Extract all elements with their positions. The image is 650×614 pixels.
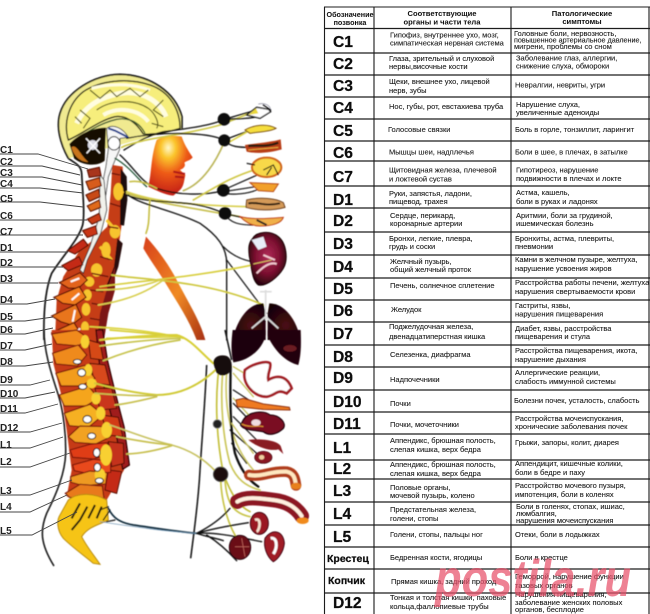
table header: Обозначение	[326, 10, 374, 19]
vertebrae lower left	[52, 330, 111, 499]
label text: C6	[0, 211, 13, 222]
vertebra codes column: D9	[333, 370, 353, 387]
organs column: голени, стопы	[390, 514, 438, 523]
symptoms column: Расстройства пищеварения, икота,	[515, 346, 637, 355]
table header: Соответствующие	[407, 9, 477, 18]
lower body illustration	[42, 330, 309, 566]
organs column: Селезенка, диафрагма	[390, 350, 471, 359]
table header	[326, 9, 612, 27]
label text: D10	[0, 389, 19, 400]
symptoms column: снижение слуха, обмороки	[516, 62, 609, 70]
vertebra codes column: C7	[333, 169, 353, 186]
symptoms column: Грыжи, запоры, колит, диарея	[515, 438, 619, 447]
sacrum and coccyx	[58, 494, 108, 564]
symptoms column: Аритмии, боли за грудиной,	[516, 211, 613, 220]
symptoms column: заболевание женских половых	[515, 598, 623, 607]
vertebra codes column: C1	[333, 34, 353, 51]
organs column: Бедренная кости, ягодицы	[390, 553, 482, 562]
organ: eye	[247, 104, 271, 118]
organs column: нерв, зубы	[389, 86, 427, 95]
symptoms column: Болезни почек, усталость, слабость	[514, 396, 640, 405]
organs column: слепая кишка, верх бедра	[390, 469, 482, 478]
vertebra codes column: Крестец	[327, 553, 369, 565]
cerebellum	[69, 128, 106, 165]
table header: органы и части тела	[404, 18, 481, 26]
organs column: мочевой пузырь, колено	[390, 491, 475, 500]
symptoms column: Аппендицит, кишечные колики,	[515, 459, 623, 468]
organs column: Сердце, перикард,	[390, 211, 455, 220]
organs column: Аппендикс, брюшная полость,	[390, 436, 496, 445]
symptoms column: Невралгии, невриты, угри	[515, 80, 605, 90]
symptoms column: тазовых органов	[515, 581, 573, 590]
organ: heart	[249, 232, 286, 285]
organ: adrenal and kidney	[248, 439, 283, 463]
symptoms column: нарушения пищеварения	[515, 310, 603, 318]
vertebra codes column: D8	[333, 349, 353, 366]
symptoms column: Камни в желчном пузыре, желтуха,	[515, 255, 637, 264]
label text: C2	[0, 157, 13, 168]
vertebra codes column: D5	[333, 281, 353, 298]
symptoms column: боли в руках и ладонях	[516, 197, 598, 206]
label text: D12	[0, 423, 19, 434]
vertebra codes column: L5	[333, 529, 352, 546]
symptoms column: боли в бедре и паху	[515, 468, 585, 477]
vertebra codes column: D11	[333, 416, 361, 433]
symptoms column: Бронхиты, астма, плевриты,	[515, 234, 614, 243]
symptoms column: пищеварения и стула	[515, 332, 591, 341]
brainstem	[98, 126, 128, 227]
organs column: двенадцатиперстная кишка	[389, 332, 486, 341]
organ: small intestine	[249, 472, 301, 489]
organs column: Голосовые связки	[388, 125, 450, 134]
symptoms column: Заболевание глаз, аллергии,	[516, 54, 617, 62]
organs column: Руки, запястья, ладони,	[389, 189, 472, 198]
organs column: Тонкая и толстая кишки, паховые	[390, 593, 506, 602]
label text: C7	[0, 227, 13, 238]
organs column: Половые органы,	[390, 483, 450, 492]
label text: L1	[0, 440, 12, 451]
label text: L2	[0, 457, 12, 468]
vertebra codes column: D6	[333, 303, 353, 320]
symptoms column: Расстройства мочеиспускания,	[515, 414, 623, 423]
symptoms column: Гипотиреоз, нарушение	[516, 166, 598, 174]
label text: C3	[0, 168, 13, 179]
symptoms column: импотенция, боли в коленях	[515, 490, 614, 499]
body outline: skull and back	[44, 74, 182, 340]
body outline: lower back and front	[42, 330, 232, 566]
organ: reproductive and bladder	[229, 512, 284, 562]
red canal strip	[96, 330, 129, 469]
label text: L4	[0, 502, 12, 513]
label text: D1	[0, 243, 13, 254]
organs column: Щеки, внешнее ухо, лицевой	[389, 77, 490, 86]
symptoms column: нарушение дыхания	[515, 355, 586, 364]
label text: L5	[0, 526, 12, 537]
symptoms column: нарушения мочеиспускания	[516, 516, 613, 525]
head and chest nerves	[90, 105, 271, 340]
organs column: Гипофиз, внутреннее ухо, мозг,	[390, 30, 499, 40]
symptoms column: мигрени, проблемы со сном	[514, 42, 612, 51]
anatomical illustration: spine, nerves and organs	[42, 74, 309, 566]
label text: C5	[0, 194, 13, 205]
label text: D5	[0, 312, 13, 323]
vertebra codes column: L1	[333, 440, 352, 457]
table header: Патологические	[552, 9, 612, 18]
organs column: Желчный пузырь,	[390, 257, 451, 266]
vertebra codes column: C3	[333, 78, 353, 95]
lower nerves	[95, 330, 267, 561]
organs column: Голени, стопы, пальцы ног	[390, 530, 483, 539]
vertebra codes column: D10	[333, 394, 362, 411]
vertebra codes column: D1	[333, 192, 353, 209]
table grid	[324, 7, 650, 614]
label text: D7	[0, 341, 13, 352]
vertebra codes column: L2	[333, 461, 352, 478]
vertebra codes column: C5	[333, 123, 353, 140]
label text: D8	[0, 357, 13, 368]
brain	[66, 81, 180, 143]
vertebra codes column: L4	[333, 506, 352, 523]
organs column: Прямая кишка, задний проход	[391, 577, 497, 586]
organs column: коронарные артерии	[390, 219, 462, 228]
face	[148, 136, 193, 196]
symptoms column	[514, 29, 650, 614]
organs column: Глаза, зрительный и слуховой	[389, 54, 494, 63]
organs column: пищевод, трахея	[389, 197, 448, 206]
organs column: Нос, губы, рот, евстахиева труба	[389, 102, 504, 111]
table header: позвонка	[334, 18, 367, 27]
organs column: Надпочечники	[390, 375, 440, 384]
organs column: Аппендикс, брюшная полость,	[390, 460, 496, 469]
vertebral bodies lower	[88, 340, 124, 493]
organs column: кольца,фаллопиевые трубы	[390, 602, 489, 611]
esophagus	[143, 237, 205, 340]
symptoms column: люмбалгия,	[516, 509, 557, 518]
organs column: Почки	[390, 399, 411, 408]
vertebra codes column: D2	[333, 213, 353, 230]
organ: spleen and kidney	[241, 412, 284, 434]
organs column	[388, 30, 506, 611]
symptoms column: Отеки, боли в лодыжках	[515, 530, 600, 539]
organ: vocal cords	[250, 183, 278, 192]
organs column: и локтевой сустав	[389, 174, 452, 184]
symptoms column: пневмонии	[515, 242, 553, 251]
symptoms column: увеличенные аденоиды	[516, 108, 599, 117]
symptoms column: Расстройство мочевого пузыря,	[515, 481, 626, 490]
vertebra codes column: D7	[333, 326, 353, 343]
symptoms column: ишемическая болезнь	[516, 219, 594, 228]
vertebra codes column: C2	[333, 56, 353, 73]
organ: ear	[245, 125, 276, 133]
symptoms column: Гастриты, язвы,	[515, 301, 570, 310]
spine base mass	[52, 330, 124, 500]
symptoms column: Диабет, язвы, расстройства	[515, 324, 612, 333]
label text: D4	[0, 295, 13, 306]
organ: thyroid round	[247, 158, 281, 177]
organs column: слепая кишка, верх бедра	[390, 445, 482, 454]
vertebra labels with leader lines	[0, 145, 88, 537]
symptoms column: подвижности в плечах и локте	[516, 174, 622, 183]
organs column: общий желчный проток	[390, 265, 472, 274]
organ: lungs upper	[233, 290, 301, 340]
organs column: Почки, мочеточники	[390, 420, 459, 429]
symptoms column: органов, бесплодие	[515, 605, 584, 614]
organs column: Печень, солнечное сплетение	[390, 281, 494, 290]
symptoms column: Боль в горле, тонзиллит, ларингит	[515, 125, 635, 134]
symptoms column: Боли в голенях, стопах, ишиас,	[516, 502, 625, 511]
symptoms column: слабость иммунной системы	[515, 377, 616, 386]
spinous processes cervical and thoracic	[52, 167, 101, 340]
spinal cord and foramina	[73, 335, 112, 483]
symptoms column: Астма, кашель,	[516, 188, 570, 197]
symptoms column: Головные боли, нервозность,	[514, 29, 616, 38]
organ: thyroid strip	[240, 217, 283, 226]
organ: large intestine	[237, 498, 309, 524]
vertebra codes column: D4	[333, 259, 353, 276]
symptoms column: Нарушение слуха,	[516, 100, 580, 109]
table: vertebrae, organs and symptoms	[324, 7, 650, 614]
organ: lungs lower	[231, 330, 301, 365]
label text: D6	[0, 325, 13, 336]
symptoms column: Боли в шее, в плечах, в затылке	[515, 148, 628, 156]
vertebra codes column: L3	[333, 483, 352, 500]
vertebra codes column: C4	[333, 100, 353, 117]
organs column: Поджелудочная железа,	[389, 322, 473, 331]
symptoms column: Боли в крестце	[515, 553, 568, 562]
ganglia upper	[217, 113, 231, 220]
organ: pancreas	[236, 398, 290, 410]
symptoms column: повышенное артериальное давление,	[514, 36, 642, 44]
upper body illustration	[44, 74, 301, 340]
vertebra codes column	[327, 34, 369, 612]
canal and vertebral bodies upper	[55, 165, 127, 340]
symptoms column: нарушение усвоения жиров	[515, 264, 612, 273]
vertebra codes column: D3	[333, 236, 353, 253]
organs column: Щитовидная железа, плечевой	[389, 166, 497, 174]
symptoms column: Аллергические реакции,	[515, 368, 600, 377]
symptoms column: Геморрой, нарушение функции	[515, 572, 624, 581]
table header: симптомы	[562, 17, 602, 26]
organs column: нервы,височные кости	[389, 62, 468, 71]
leader lines	[0, 154, 88, 535]
label text: C1	[0, 145, 13, 156]
organ: neck muscles strip	[246, 198, 285, 210]
symptoms column: хронические заболевания почек	[515, 422, 628, 431]
label text: D2	[0, 258, 13, 269]
symptoms column: Расстройства работы печени, желтуха	[515, 278, 650, 287]
vertebra codes column: Копчик	[328, 575, 366, 587]
organ: nose and mouth strip	[245, 139, 282, 153]
symptoms column: Нарушения пищеварения,	[515, 590, 606, 599]
organs column: Желудок	[391, 305, 422, 314]
label text: D9	[0, 375, 13, 386]
vertebra codes column: D12	[333, 595, 362, 612]
label text	[0, 145, 19, 537]
label text: C4	[0, 179, 13, 190]
vertebra codes column: C6	[333, 145, 353, 162]
organ: stomach	[244, 362, 292, 397]
organs column: грудь и соски	[389, 242, 435, 251]
organs column: Предстательная железа,	[390, 505, 476, 514]
label text: D11	[0, 404, 18, 415]
vertebral foramina upper	[71, 278, 80, 337]
organs column: симпатическая нервная система	[390, 38, 505, 48]
label text: D3	[0, 274, 13, 285]
organs column: Мышцы шеи, надплечья	[389, 148, 474, 156]
ganglia lower	[213, 355, 232, 482]
organs column: Бронхи, легкие, плевра,	[389, 234, 473, 243]
label text: L3	[0, 486, 12, 497]
symptoms column: нарушения свертываемости крови	[515, 287, 635, 296]
